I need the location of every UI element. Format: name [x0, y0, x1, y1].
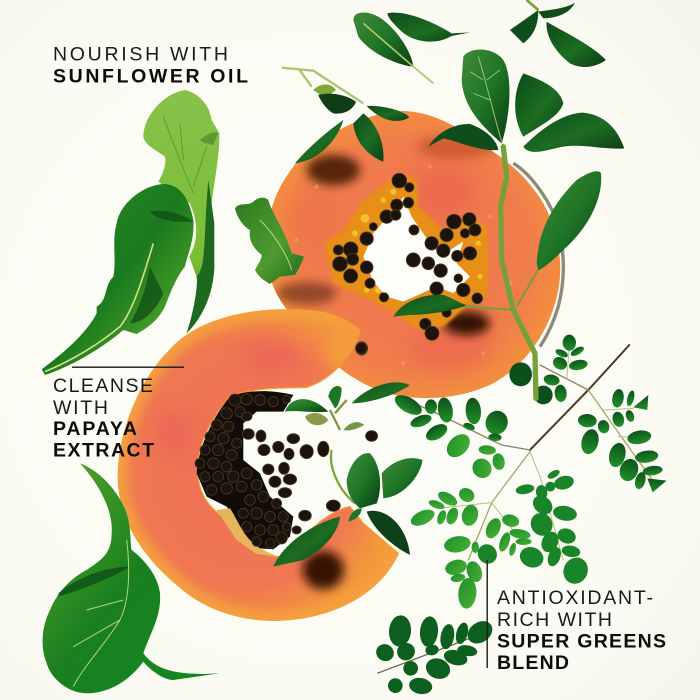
- label: cleanse with papaya extract: WITH: [53, 397, 108, 419]
- flesh: [268, 111, 560, 398]
- center leaf: [393, 295, 467, 317]
- label: antioxidant-rich with super greens blend: [486, 560, 666, 674]
- label: antioxidant-rich with super greens blend: RICH WITH: [497, 609, 612, 631]
- label: antioxidant-rich with super greens blend: ANTIOXIDANT-: [497, 587, 653, 609]
- top left leaf: [353, 12, 413, 67]
- rind: [513, 163, 563, 347]
- label: cleanse with papaya extract: EXTRACT: [53, 440, 154, 462]
- seeds in mass: [195, 394, 291, 548]
- label: nourish with sunflower oil: SUNFLOWER OIL: [53, 66, 248, 88]
- cavity hole: [363, 197, 470, 302]
- arugula leaves top left: [42, 90, 219, 375]
- large basil leaves: [428, 124, 498, 150]
- branch stems: [443, 267, 540, 310]
- seed cavity: [325, 173, 488, 330]
- right leaf: [537, 171, 601, 270]
- lower papaya slice: [118, 310, 398, 620]
- top middle leaf: [387, 13, 470, 42]
- flesh flecks: [314, 184, 319, 189]
- leaves lower: [273, 517, 340, 567]
- label: nourish with sunflower oil: NOURISH WITH: [53, 44, 228, 66]
- seed mass: [197, 391, 293, 549]
- leaves upper: [352, 382, 410, 403]
- moringa sprig: [373, 335, 667, 696]
- main stem: [501, 147, 536, 398]
- left sprig: [282, 68, 363, 103]
- upper dark leaflets: [392, 335, 667, 492]
- label: antioxidant-rich with super greens blend: SUPER GREENS: [497, 630, 666, 652]
- pale pulp: [217, 508, 277, 556]
- flesh shading: [418, 164, 472, 215]
- label: antioxidant-rich with super greens blend: BLEND: [497, 652, 569, 674]
- stems: [410, 345, 655, 560]
- arugula small leaf on upper papaya: [235, 198, 304, 284]
- stem lower: [331, 450, 355, 503]
- top right cluster: [527, 0, 538, 10]
- stem upper: [330, 400, 347, 430]
- basil on upper papaya and top: [282, 0, 624, 398]
- label: nourish with sunflower oil: [53, 44, 248, 88]
- upper papaya slice: [268, 111, 563, 398]
- label: cleanse with papaya extract: [53, 366, 184, 462]
- loose seeds: [241, 342, 378, 544]
- flesh rim and shading: [118, 310, 398, 620]
- label: cleanse with papaya extract: CLEANSE: [53, 375, 153, 397]
- light leaflets: [408, 485, 532, 609]
- seeds: [333, 173, 483, 340]
- middle leaflets: [515, 468, 592, 588]
- loose seed: [356, 343, 367, 354]
- bottom left sprig: [373, 614, 497, 696]
- basil sprig on lower papaya: [273, 382, 423, 567]
- cavity pulp flecks: [352, 189, 483, 293]
- label: cleanse with papaya extract: PAPAYA: [53, 418, 137, 440]
- arugula leaf bottom left: [43, 463, 220, 693]
